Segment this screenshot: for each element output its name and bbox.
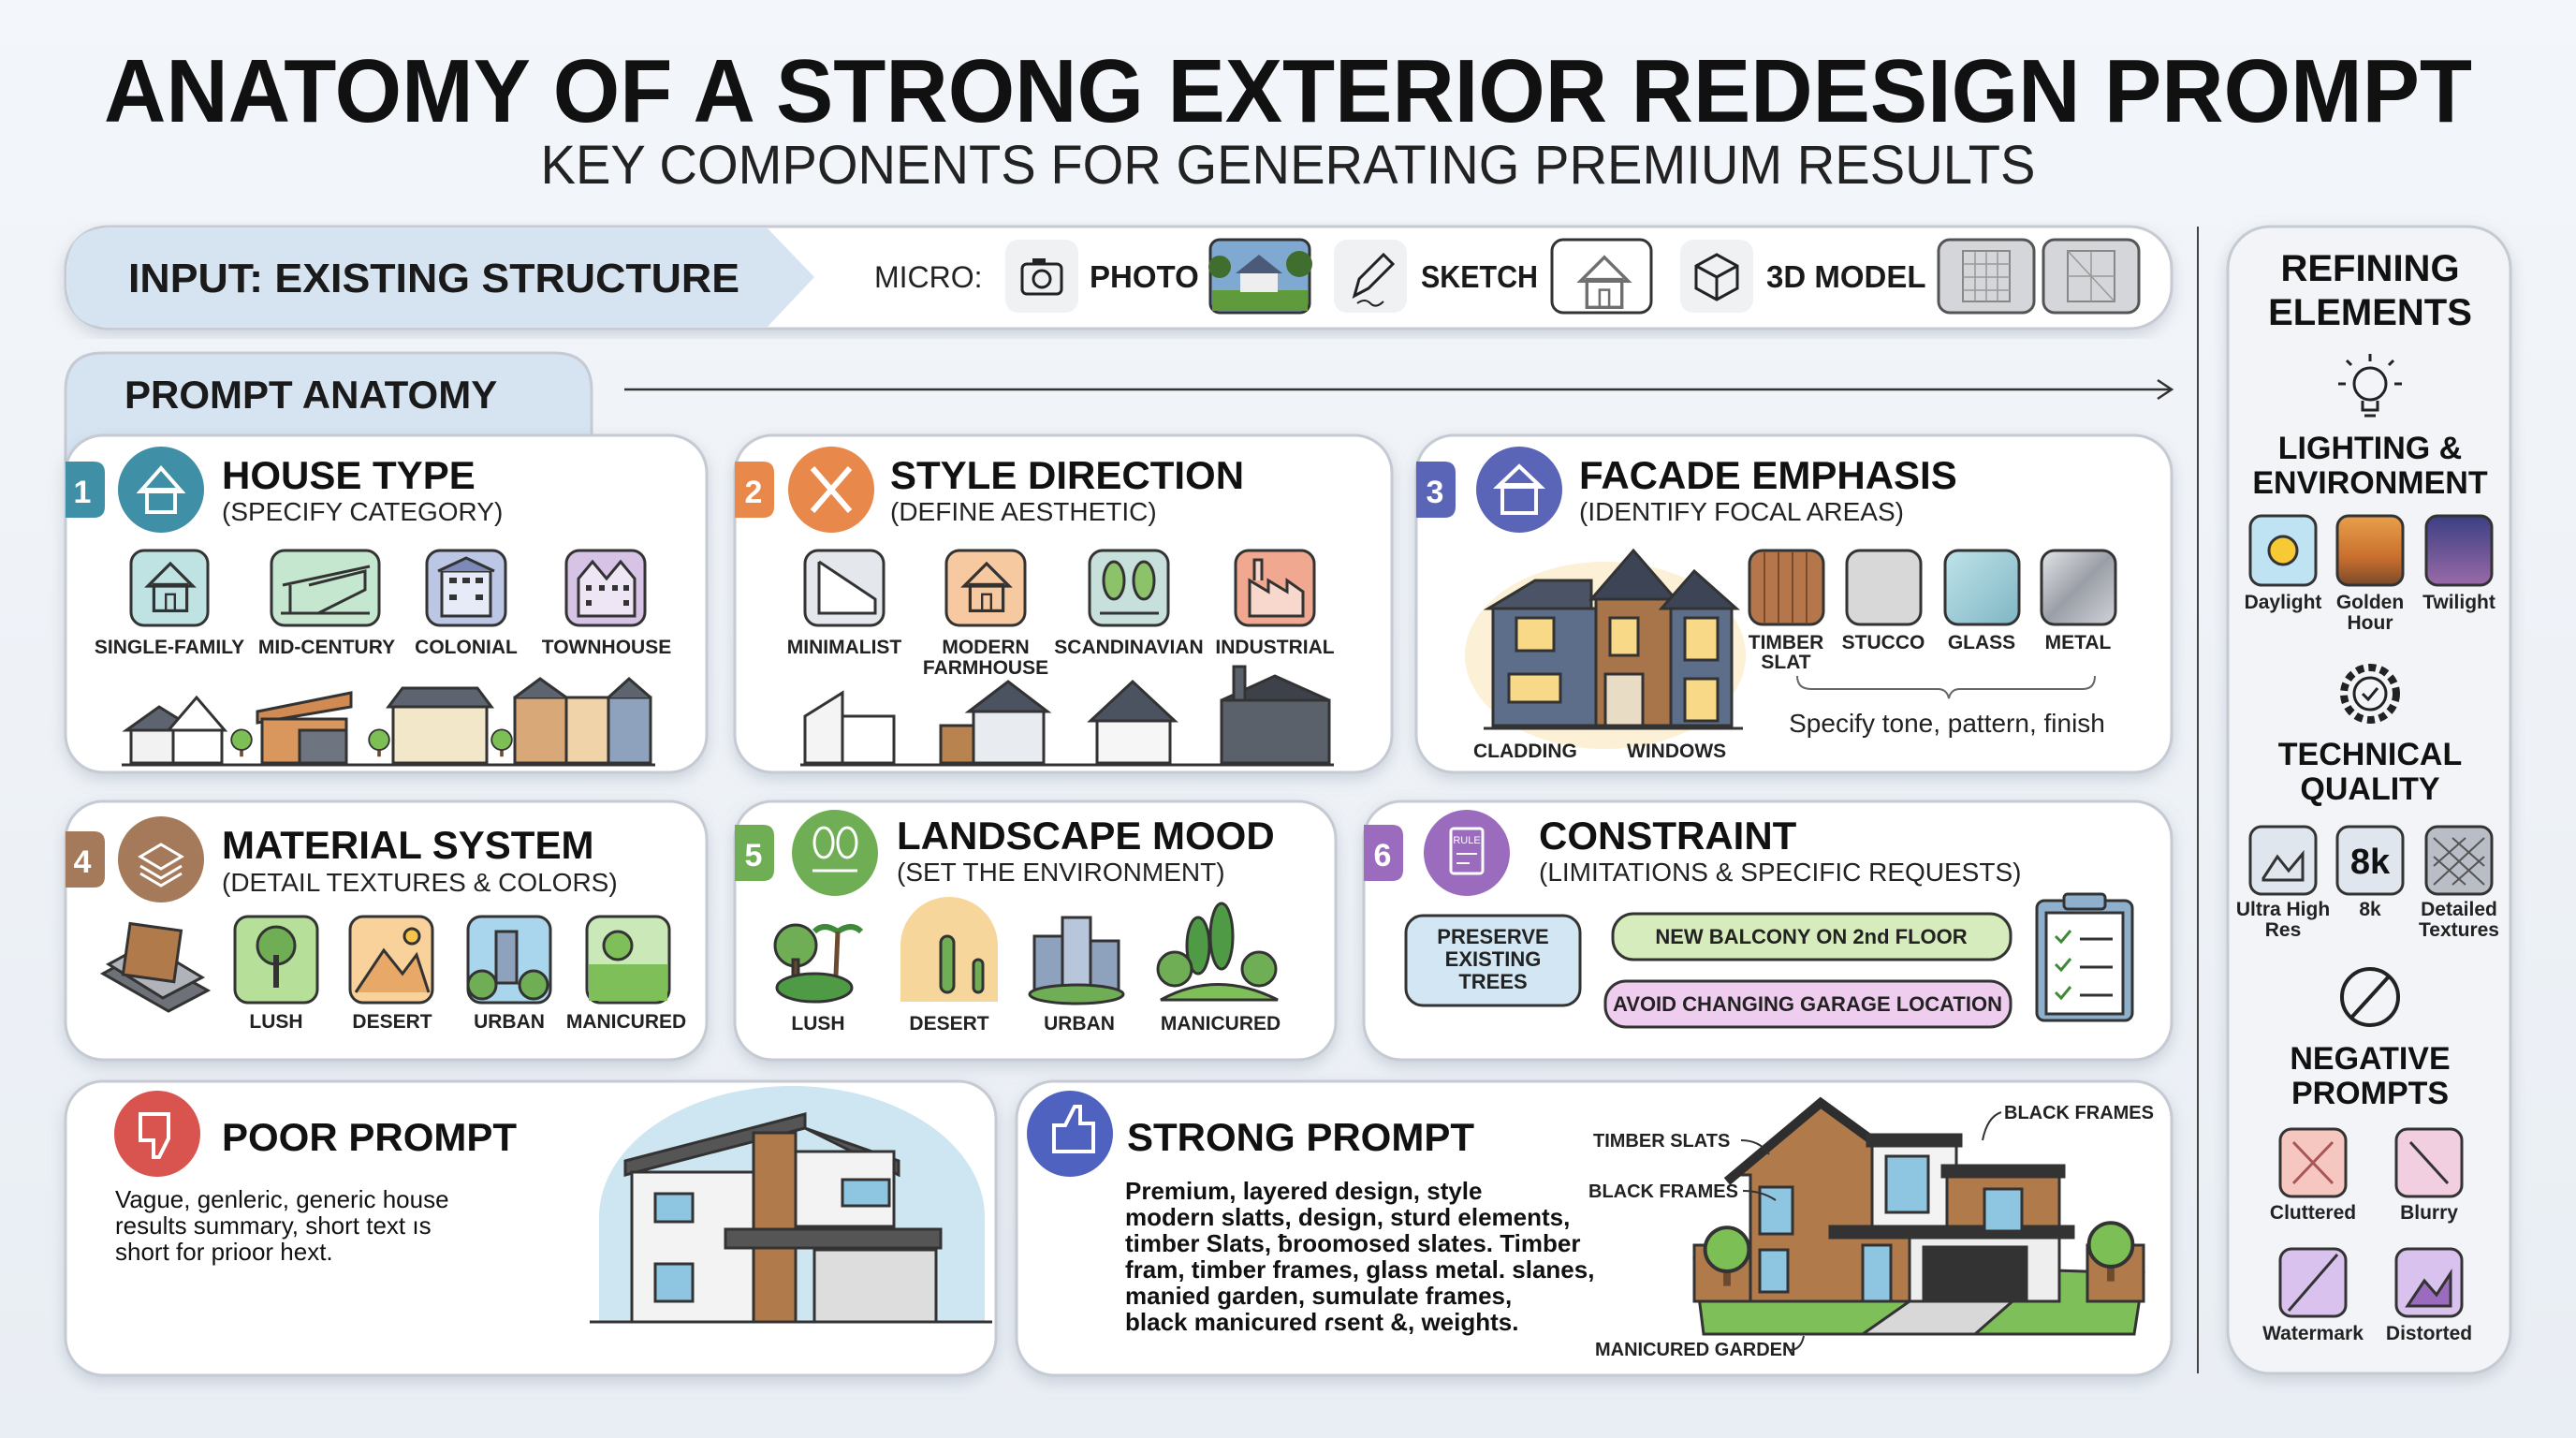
panel: facade emphasis: TIMBER: [1749, 632, 1823, 653]
panel: poor prompt: [66, 1081, 996, 1375]
body: results summary, short text ıs: [115, 1211, 432, 1240]
panel: refining elements: Cluttered: [2270, 1202, 2356, 1224]
preserve box: PRESERVE: [1437, 925, 1549, 948]
panel: material system: URBAN: [474, 1011, 545, 1033]
labels: [95, 637, 671, 658]
panel: refining elements: Detailed: [2421, 899, 2497, 920]
tiles: [235, 917, 669, 1003]
preserve box: EXISTING: [1445, 947, 1541, 971]
icon: clipboard: [2037, 894, 2132, 1020]
callout labels: MANICURED GARDEN: [1595, 1340, 1795, 1360]
micro label: MICRO:: [874, 260, 983, 294]
lighting heading: [2252, 431, 2488, 501]
heading: CONSTRAINT: [1539, 814, 1797, 858]
facade labels: CLADDING: [1473, 741, 1577, 762]
badge 3: [1416, 447, 1562, 533]
callout labels: BLACK FRAMES: [1588, 1181, 1738, 1202]
badge 5: 5: [745, 838, 762, 873]
badge 6: RULE: [1453, 835, 1481, 846]
body: [115, 1185, 449, 1266]
negative heading: PROMPTS: [2291, 1076, 2449, 1111]
panel: facade emphasis: STUCCO: [1842, 632, 1925, 653]
panel: style direction: [735, 435, 1392, 772]
labels: MODERN: [942, 637, 1030, 658]
facade labels: WINDOWS: [1627, 741, 1726, 762]
panel: refining elements: Distorted: [2386, 1323, 2472, 1344]
heading: MATERIAL SYSTEM: [222, 823, 593, 867]
panel: facade emphasis: (IDENTIFY FOCAL AREAS): [1579, 497, 1904, 526]
icon: cube: [1680, 240, 1753, 313]
title: ANATOMY OF A STRONG EXTERIOR REDESIGN PROMPT: [104, 41, 2472, 141]
body: Vague, genleric, generic house: [115, 1185, 449, 1213]
callout labels: [1588, 1103, 2154, 1360]
heading: FACADE EMPHASIS: [1579, 453, 1957, 497]
labels: SCANDINAVIAN: [1054, 637, 1204, 658]
panel: material system: MANICURED: [566, 1011, 686, 1033]
panel: strong prompt: [1017, 1081, 2172, 1375]
panel: landscape mood: [735, 801, 1336, 1060]
technical heading: TECHNICAL: [2278, 737, 2462, 772]
technical heading: QUALITY: [2300, 771, 2440, 807]
material swatches: [1749, 550, 2115, 624]
panel: refining elements: [2228, 227, 2510, 1373]
sketch thumbnail: [1552, 240, 1651, 313]
body: fram, timber frames, glass metal. slanes,: [1125, 1255, 1594, 1284]
badge 2: [735, 447, 874, 533]
labels: [787, 637, 1335, 679]
icon: pencil: [1334, 240, 1407, 313]
badge 6: 6: [1374, 838, 1391, 873]
material stack icon: [103, 924, 208, 1011]
panel: refining elements: Textures: [2419, 919, 2499, 941]
house illustration: [590, 1086, 992, 1322]
panel: refining elements: Blurry: [2400, 1202, 2458, 1224]
panel: facade emphasis: Specify tone, pattern, finish: [1789, 709, 2105, 738]
negative heading: [2290, 1041, 2451, 1111]
input label: INPUT: EXISTING STRUCTURE: [128, 256, 739, 301]
body: black manicured ɾsent &, weights.: [1125, 1308, 1518, 1336]
panel: house type: (SPECIFY CATEGORY): [222, 497, 503, 526]
badge 5: [735, 810, 878, 896]
body: short for prioor hext.: [115, 1238, 333, 1266]
body: [1125, 1177, 1594, 1336]
icon: gear: [2344, 668, 2396, 720]
labels: COLONIAL: [415, 637, 518, 658]
prompt anatomy tab: PROMPT ANATOMY: [124, 373, 497, 417]
sketch label: SKETCH: [1421, 259, 1538, 294]
panel: refining elements: Ultra High: [2236, 899, 2330, 920]
panel: landscape mood: DESERT: [909, 1013, 989, 1034]
panel: material system: DESERT: [352, 1011, 432, 1033]
negative heading: NEGATIVE: [2290, 1041, 2451, 1077]
lighting heading: LIGHTING &: [2278, 431, 2462, 466]
brace: [1797, 676, 2095, 698]
badge 1: 1: [74, 475, 91, 510]
facade house illustration: [1465, 550, 1746, 749]
panel: facade emphasis: [1416, 435, 2172, 772]
callout labels: BLACK FRAMES: [2004, 1103, 2154, 1123]
arrow: anatomy flow: [624, 380, 2172, 399]
heading: REFINING: [2280, 248, 2460, 289]
badge 3: 3: [1427, 475, 1443, 510]
labels: MINIMALIST: [787, 637, 901, 658]
labels: TOWNHOUSE: [542, 637, 671, 658]
heading: STRONG PROMPT: [1127, 1115, 1474, 1159]
heading: ELEMENTS: [2268, 292, 2472, 333]
lighting heading: ENVIRONMENT: [2252, 465, 2488, 501]
preserve box: [1406, 916, 1580, 1005]
3d model label: 3D MODEL: [1766, 259, 1926, 294]
badge 1: [66, 447, 204, 533]
house strip: [122, 679, 655, 765]
panel: facade emphasis: SLAT: [1761, 652, 1811, 673]
body: modern slatts, design, sturd elements,: [1125, 1203, 1570, 1231]
technical heading: [2278, 737, 2462, 807]
panel: landscape mood: LUSH: [791, 1013, 845, 1034]
icon: camera: [1005, 240, 1078, 313]
heading: STYLE DIRECTION: [890, 453, 1244, 497]
body: Premium, layered design, style: [1125, 1177, 1483, 1205]
photo thumbnail: [1208, 240, 1312, 313]
icon: thumbs down: [114, 1091, 200, 1177]
panel: refining elements: 8k: [2350, 843, 2391, 882]
icon: thumbs up: [1027, 1091, 1113, 1177]
panel: refining elements: Watermark: [2262, 1323, 2364, 1344]
prompt anatomy tab: [66, 353, 592, 487]
panel: facade emphasis: GLASS: [1948, 632, 2015, 653]
badge 2: 2: [745, 475, 762, 510]
pill: balcony: NEW BALCONY ON 2nd FLOOR: [1655, 925, 1968, 948]
heading: [2268, 248, 2472, 333]
house strip: [800, 667, 1334, 765]
icon: no sign: [2342, 969, 2398, 1025]
panel: constraint: (LIMITATIONS & SPECIFIC REQUESTS): [1539, 858, 2021, 887]
strong house illustration: [1694, 1103, 2144, 1334]
icon tiles: [805, 550, 1314, 625]
callout labels: TIMBER SLATS: [1593, 1131, 1730, 1152]
icon: bulb: [2338, 354, 2402, 416]
panel: refining elements: Golden: [2336, 592, 2404, 613]
pill: garage: [1605, 981, 2011, 1027]
panel: refining elements: Hour: [2348, 612, 2393, 634]
body: manied garden, sumulate frames,: [1125, 1282, 1512, 1310]
input bar: [66, 227, 2172, 329]
heading: LANDSCAPE MOOD: [897, 814, 1275, 858]
pill: balcony: [1613, 914, 2011, 960]
panel: refining elements: Daylight: [2245, 592, 2321, 613]
panel: constraint: [1364, 801, 2172, 1060]
labels: FARMHOUSE: [923, 657, 1048, 679]
panel: house type: [66, 435, 707, 772]
panel: refining elements: Res: [2265, 919, 2301, 941]
panel: material system: LUSH: [249, 1011, 303, 1033]
facade labels: [1473, 741, 1726, 762]
panel: landscape mood: (SET THE ENVIRONMENT): [897, 858, 1225, 887]
pill: garage: AVOID CHANGING GARAGE LOCATION: [1613, 992, 2002, 1016]
badge 4: [66, 816, 204, 902]
panel: material system: (DETAIL TEXTURES & COLORS): [222, 868, 618, 897]
3d thumbnails: [1939, 240, 2139, 313]
labels: INDUSTRIAL: [1215, 637, 1335, 658]
lighting tiles: [2250, 516, 2492, 585]
panel: landscape mood: MANICURED: [1161, 1013, 1281, 1034]
panel: facade emphasis: METAL: [2045, 632, 2112, 653]
heading: HOUSE TYPE: [222, 453, 476, 497]
panel: landscape mood: URBAN: [1044, 1013, 1115, 1034]
landscape icons: [775, 897, 1278, 1004]
heading: POOR PROMPT: [222, 1115, 517, 1159]
panel: refining elements: Twilight: [2422, 592, 2496, 613]
photo label: PHOTO: [1090, 259, 1199, 294]
preserve box: TREES: [1458, 970, 1528, 993]
panel: material system: [66, 801, 707, 1060]
badge 6: [1364, 810, 1510, 896]
panel: refining elements: 8k: [2359, 899, 2381, 920]
divider: [2197, 227, 2199, 1373]
labels: MID-CENTURY: [258, 637, 395, 658]
badge 4: 4: [74, 844, 92, 880]
subtitle: KEY COMPONENTS FOR GENERATING PREMIUM RESULTS: [541, 135, 2035, 196]
panel: style direction: (DEFINE AESTHETIC): [890, 497, 1157, 526]
icon tiles: [131, 550, 645, 625]
body: timber Slats, ƀroomosed slates. Timber: [1125, 1229, 1580, 1257]
labels: SINGLE-FAMILY: [95, 637, 244, 658]
